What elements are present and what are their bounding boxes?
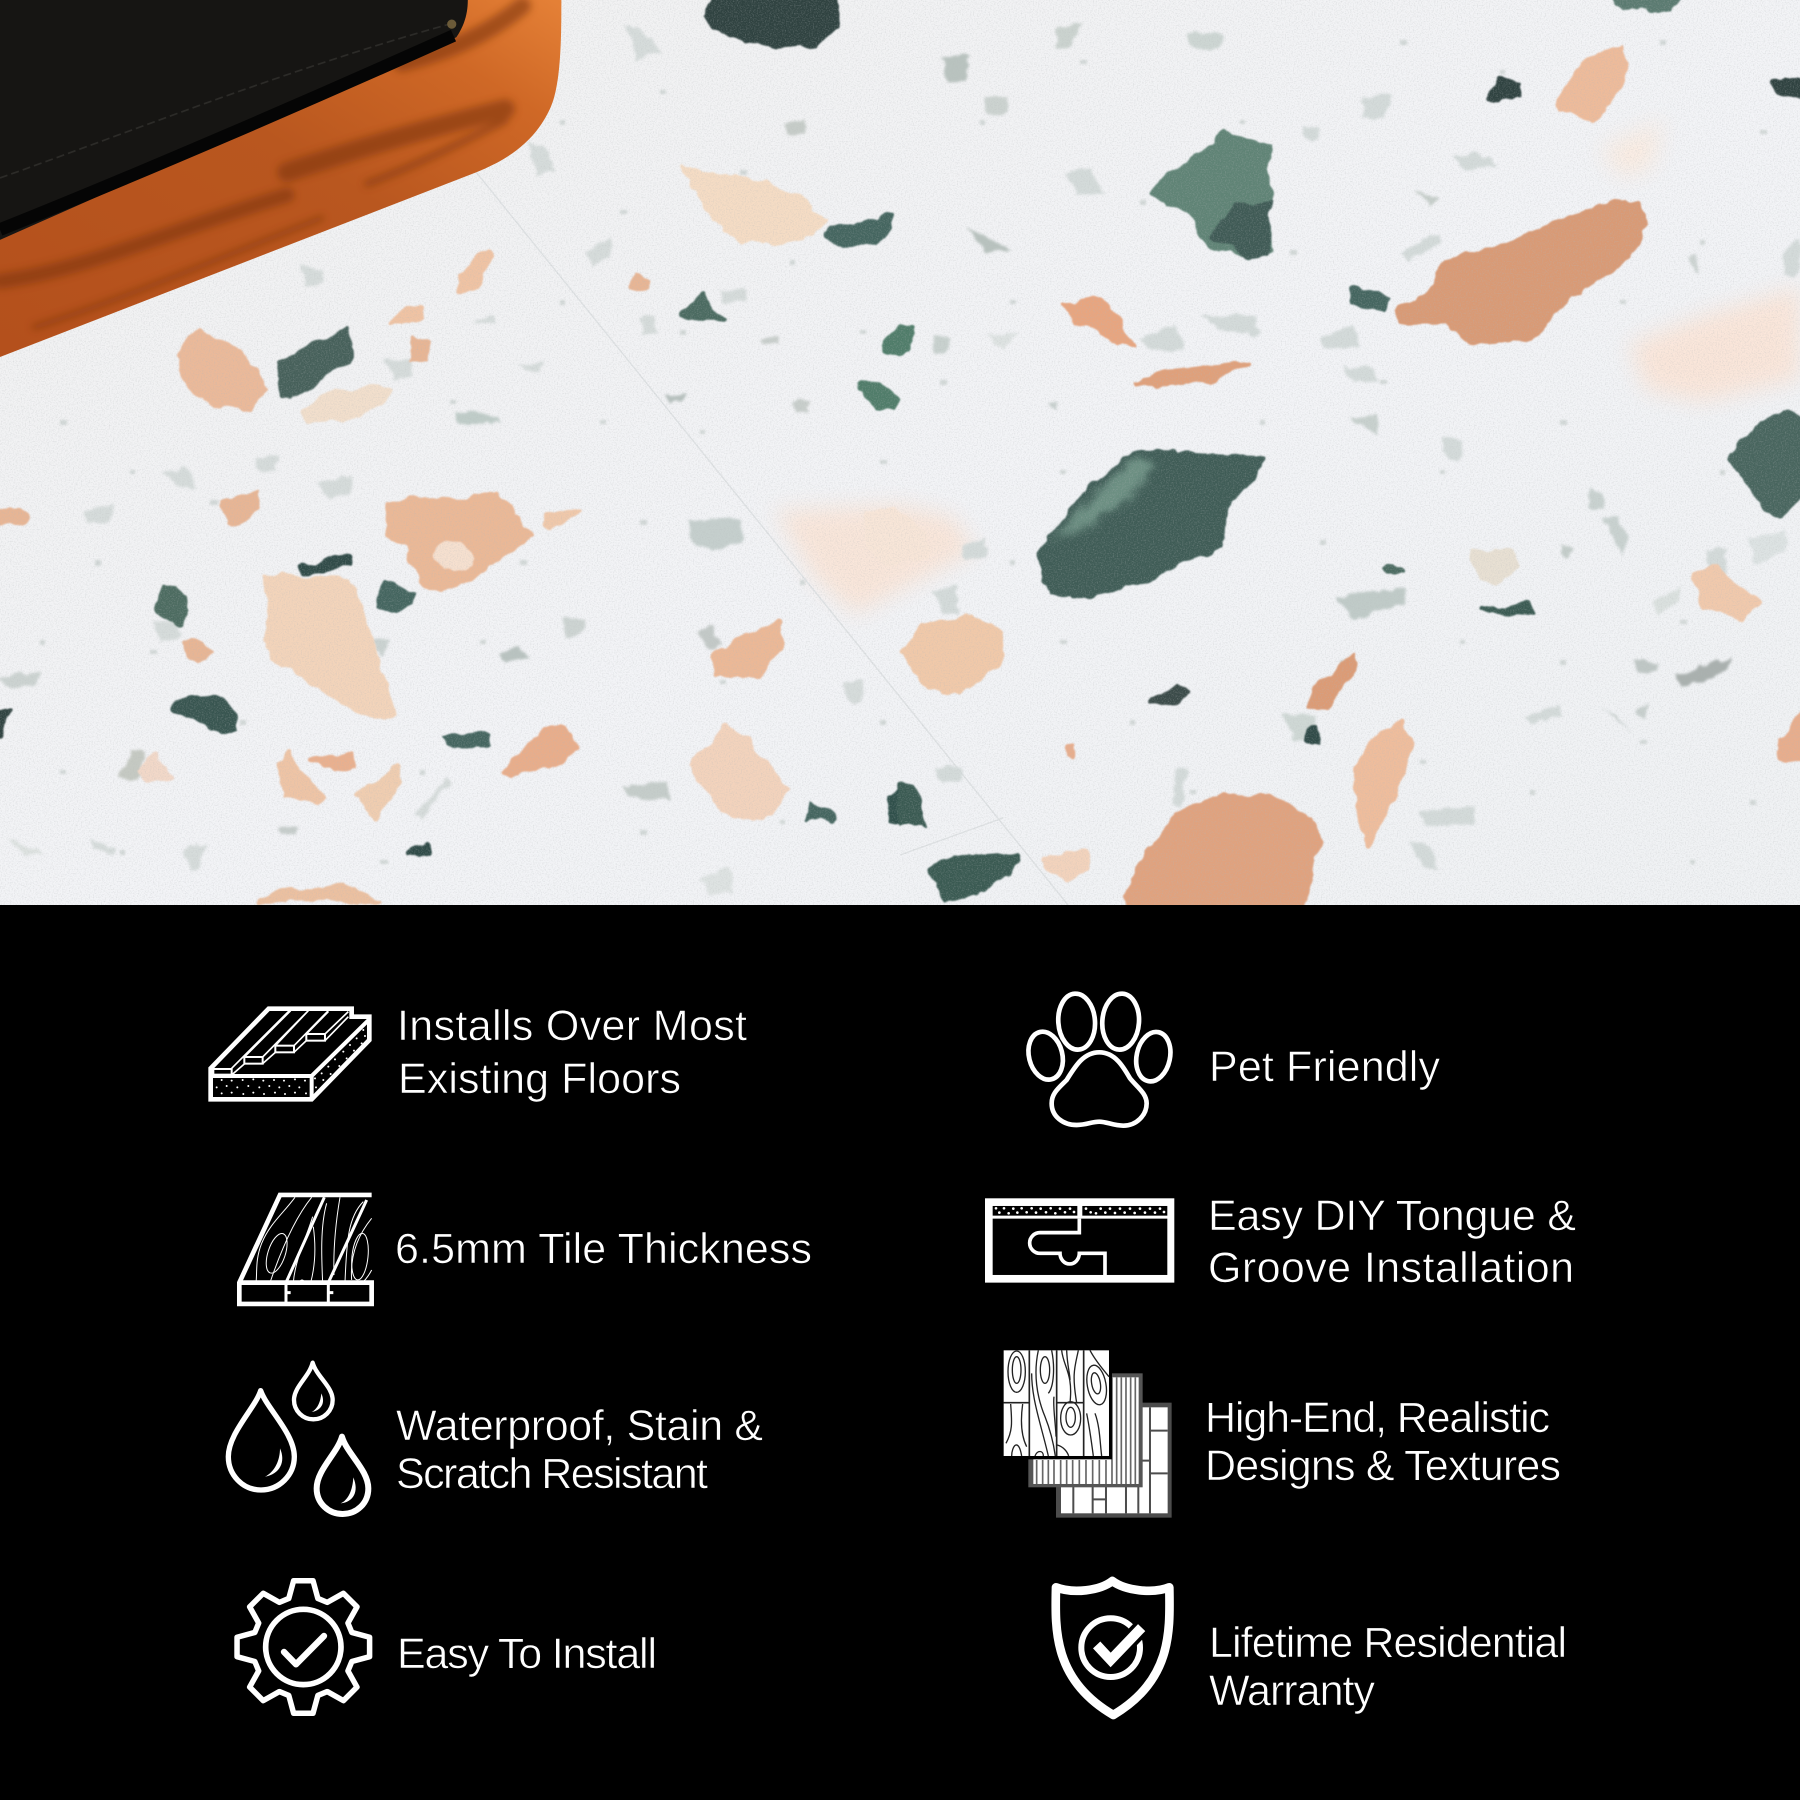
icon: layered floor slab <box>211 1009 369 1099</box>
text: lifetime residential warranty <box>1209 1619 1567 1715</box>
front swatch <box>1003 1350 1112 1459</box>
text: installs over most existing floors <box>397 1002 747 1103</box>
icon: shield with check <box>1056 1581 1170 1715</box>
text: easy diy tongue and groove installation <box>1208 1192 1576 1292</box>
wood grain lines <box>256 1197 372 1284</box>
terrazzo stones, right half <box>866 0 1800 907</box>
pale blurred stones <box>775 121 1800 614</box>
tiny stone specks <box>40 40 1767 865</box>
icon: paw print <box>1024 992 1175 1126</box>
floor grain texture <box>0 0 1800 905</box>
text: waterproof stain and scratch resistant: Scratch Resistant <box>396 1450 708 1498</box>
icon: water drops <box>228 1363 368 1514</box>
text: installs over most existing floors: Existing Floors <box>398 1055 681 1103</box>
text: easy to install: Easy To Install <box>397 1630 657 1678</box>
terrazzo stones, left half <box>0 0 918 900</box>
back swatch <box>1056 1403 1172 1518</box>
stipple dots <box>995 1207 1165 1215</box>
icon: tongue and groove joint <box>985 1198 1174 1283</box>
text: installs over most existing floors: Installs Over Most <box>397 1002 747 1050</box>
icon: stacked design swatches <box>1003 1350 1172 1518</box>
chair: wooden base <box>0 0 561 357</box>
text: high-end realistic designs and textures <box>1205 1394 1561 1490</box>
chair: black leather seat <box>0 0 468 240</box>
text: high-end realistic designs and textures: High-End, Realistic <box>1205 1394 1550 1442</box>
icon: wood plank thickness <box>239 1195 372 1304</box>
icon: gear with check <box>237 1581 370 1713</box>
floor seams <box>476 172 1068 905</box>
text: 6.5mm tile thickness: 6.5mm Tile Thickness <box>395 1225 812 1273</box>
photo panel: terrazzo floor with chair <box>0 0 1800 907</box>
stipple dots <box>216 1029 366 1095</box>
text: waterproof stain and scratch resistant: Waterproof, Stain & <box>396 1402 763 1450</box>
text: lifetime residential warranty: Warranty <box>1209 1667 1376 1715</box>
text: pet friendly: Pet Friendly <box>1209 1043 1440 1091</box>
text: lifetime residential warranty: Lifetime Residential <box>1209 1619 1567 1667</box>
features panel background <box>0 905 1800 1800</box>
text: waterproof stain and scratch resistant <box>396 1402 763 1498</box>
grey stone flecks, right half <box>932 23 1800 870</box>
text: high-end realistic designs and textures: Designs & Textures <box>1205 1442 1561 1490</box>
grey stone flecks, left half <box>0 23 864 895</box>
text: easy diy tongue and groove installation: Groove Installation <box>1208 1244 1574 1292</box>
text: easy diy tongue and groove installation: Easy DIY Tongue & <box>1208 1192 1576 1240</box>
middle swatch <box>1028 1373 1143 1487</box>
